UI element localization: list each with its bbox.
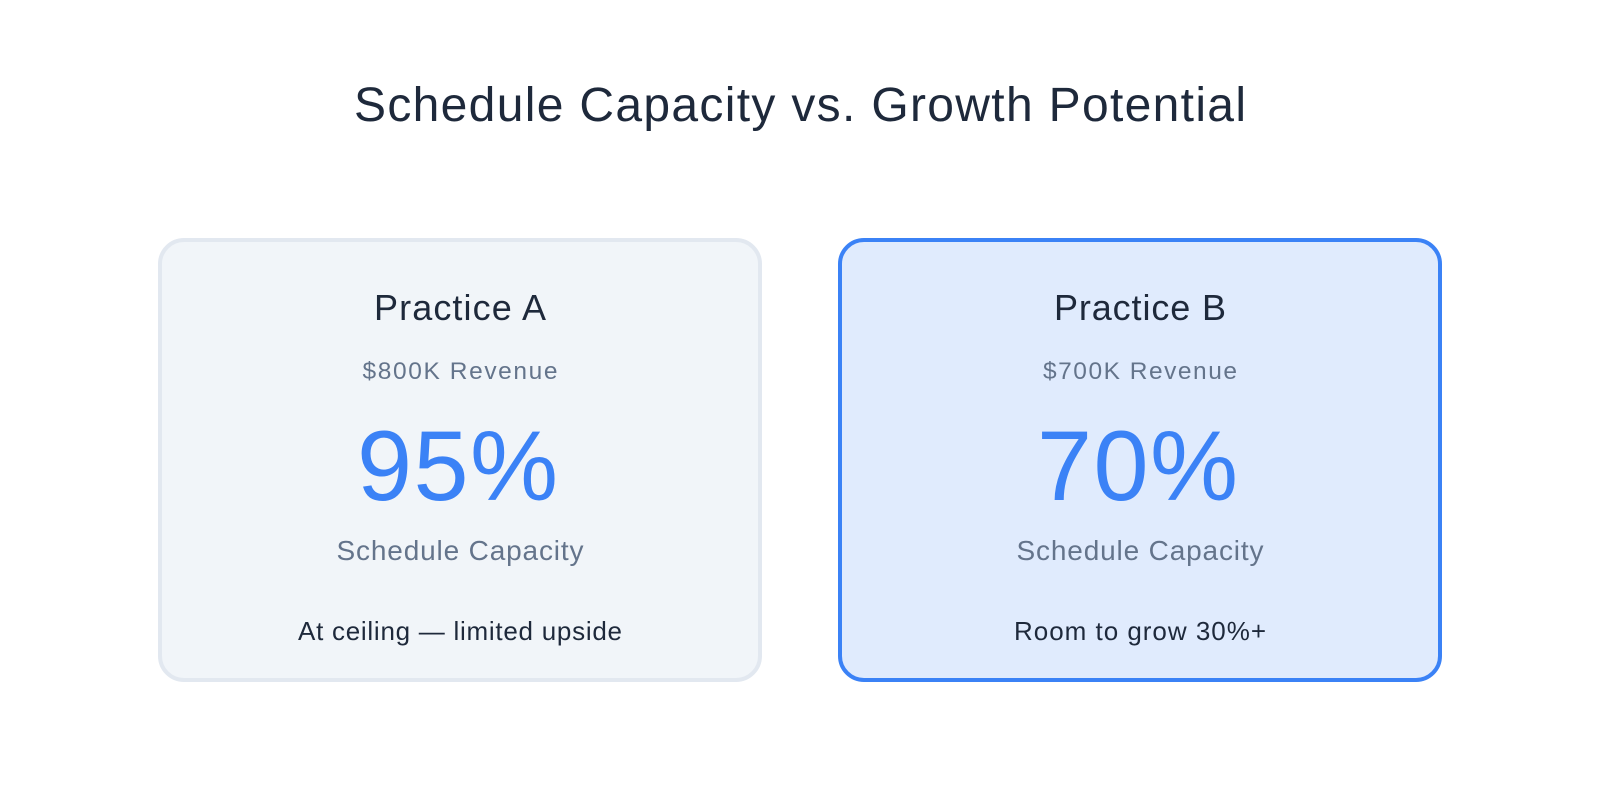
- label A: Schedule Capacity: [336, 535, 584, 566]
- stat: 95%: 95%: [357, 410, 558, 521]
- heading: Practice A: Practice A: [374, 287, 546, 328]
- panel: Practice A: [160, 240, 760, 680]
- revenue A: $800K Revenue: [362, 358, 558, 385]
- note A: At ceiling — limited upside: [298, 616, 622, 646]
- heading: Practice B: Practice B: [1054, 287, 1226, 328]
- panel: Practice B: [840, 240, 1440, 680]
- card background B: [840, 240, 1440, 680]
- title: Schedule Capacity vs. Growth Potential: [354, 79, 1246, 132]
- card background A: [160, 240, 760, 680]
- label B: Schedule Capacity: [1016, 535, 1264, 566]
- note B: Room to grow 30%+: [1014, 616, 1266, 646]
- stat: 70%: 70%: [1037, 410, 1238, 521]
- revenue B: $700K Revenue: [1043, 358, 1237, 385]
